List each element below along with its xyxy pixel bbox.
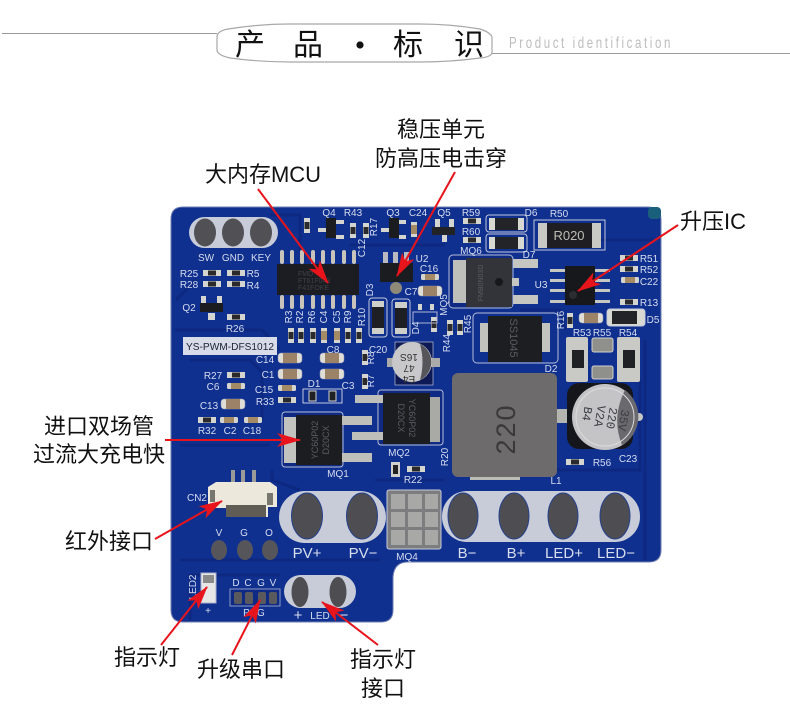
board silkscreen labels: C12 xyxy=(357,238,368,257)
MOSFET MQ2: D20CX xyxy=(396,403,406,433)
board silkscreen labels: R55 xyxy=(593,328,612,339)
board silkscreen labels: R3 xyxy=(284,310,295,323)
callout: dual MOSFET input xyxy=(33,414,300,467)
V G O pads xyxy=(211,528,278,560)
board silkscreen labels: MQ2 xyxy=(388,448,410,459)
inductor L1: 220 xyxy=(491,403,521,455)
board silkscreen labels: D3 xyxy=(365,283,376,296)
model label plate: YS-PWM-DFS1012 xyxy=(186,342,274,353)
inductor L1 xyxy=(452,373,557,480)
board silkscreen labels: MQ6 xyxy=(460,246,482,257)
board silkscreen labels: R8 xyxy=(366,351,377,364)
board silkscreen labels: R33 xyxy=(256,397,275,408)
board silkscreen labels: R44 xyxy=(442,333,453,352)
passive components xyxy=(198,218,639,477)
callout: infrared port: 红外接口 xyxy=(65,529,153,554)
callout: voltage regulation xyxy=(375,117,507,276)
title badge: 品 xyxy=(293,29,323,62)
MOSFET MQ1: D20CX xyxy=(321,425,331,455)
MOSFET MQ1: YC60P02 xyxy=(310,421,320,459)
callout: infrared port xyxy=(65,501,222,554)
MOSFET MQ6 xyxy=(449,255,538,308)
electrolytic capacitor C23: 220 xyxy=(602,406,620,430)
board silkscreen labels: D5 xyxy=(647,315,660,326)
electrolytic capacitor C20 xyxy=(387,342,440,385)
board silkscreen labels: R27 xyxy=(204,371,223,382)
callout: dual MOSFET input: 进口双场管 xyxy=(44,414,154,439)
board silkscreen labels: D4 xyxy=(411,321,422,334)
header: right rule xyxy=(491,53,790,54)
main MCU chip: FMD xyxy=(298,271,313,278)
sense resistor R020 xyxy=(534,220,605,250)
board silkscreen labels: D2 xyxy=(545,364,558,375)
callout: boost IC xyxy=(578,209,746,291)
board silkscreen labels: D6 xyxy=(525,208,538,219)
programming header PRG xyxy=(230,578,280,619)
board silkscreen labels: D1 xyxy=(308,379,321,390)
solder strip: B- B+ LED+ LED-: B− xyxy=(458,545,477,562)
board silkscreen labels: R45 xyxy=(463,314,474,333)
V G O pads: V xyxy=(216,528,223,539)
callout: MCU xyxy=(205,162,328,283)
electrolytic capacitor C23: B4 xyxy=(578,405,594,422)
callout: dual MOSFET input: 过流大充电快 xyxy=(33,442,165,467)
board silkscreen labels: MQ1 xyxy=(327,469,349,480)
indicator LED2 xyxy=(188,573,216,617)
board silkscreen labels: R53 xyxy=(573,328,592,339)
board silkscreen labels: Q5 xyxy=(437,208,451,219)
LED solder pads xyxy=(284,575,356,624)
board silkscreen labels: U2 xyxy=(416,254,429,265)
circuit board xyxy=(171,207,661,624)
board silkscreen labels: R13 xyxy=(640,298,659,309)
title badge: 识 xyxy=(454,29,484,62)
board silkscreen labels: C15 xyxy=(255,385,274,396)
board silkscreen labels: R6 xyxy=(307,310,318,323)
board substrate xyxy=(171,207,661,622)
MOSFET pad array MQ4: MQ4 xyxy=(396,552,418,563)
board silkscreen labels: C7 xyxy=(405,287,418,298)
sense resistor R020: R020 xyxy=(553,228,585,243)
board silkscreen labels: R10 xyxy=(357,307,368,326)
Schottky diode SS1045: SS1045 xyxy=(507,318,519,358)
board silkscreen labels: R60 xyxy=(462,227,481,238)
title badge: 标 xyxy=(393,29,423,62)
small SOT transistors xyxy=(200,218,455,320)
board silkscreen labels: R20 xyxy=(440,447,451,466)
MOSFET pad array MQ4 xyxy=(387,490,441,563)
terminals: SW GND KEY xyxy=(189,217,278,264)
solder strip: B- B+ LED+ LED-: LED− xyxy=(597,545,635,562)
board silkscreen labels: R28 xyxy=(180,280,199,291)
board silkscreen labels: C1 xyxy=(262,370,275,381)
subtitle: Product identification xyxy=(509,33,673,51)
title badge xyxy=(217,24,492,62)
board silkscreen labels: C8 xyxy=(327,345,340,356)
board silkscreen labels: R25 xyxy=(180,269,199,280)
board silkscreen labels: C16 xyxy=(420,264,439,275)
callout: voltage regulation: 稳压单元 xyxy=(397,117,485,142)
board silkscreen labels: R52 xyxy=(640,265,659,276)
board silkscreen labels: R54 xyxy=(619,328,638,339)
voltage regulator chip U2 xyxy=(380,252,413,294)
board silkscreen labels: C20 xyxy=(369,345,388,356)
board silkscreen labels: C4 xyxy=(319,310,330,323)
board silkscreen labels: C22 xyxy=(640,277,659,288)
board silkscreen labels: C14 xyxy=(256,355,275,366)
board silkscreen labels: R59 xyxy=(462,208,481,219)
MOSFET MQ2 xyxy=(355,390,443,445)
title badge: 产 xyxy=(235,29,265,62)
board silkscreen labels: R2 xyxy=(295,310,306,323)
board silkscreen labels: R56 xyxy=(593,458,612,469)
power resistors R53 R55 R54 xyxy=(566,337,640,382)
board silkscreen labels: R7 xyxy=(366,374,377,387)
board silkscreen labels: C13 xyxy=(200,401,219,412)
board silkscreen labels: Q2 xyxy=(182,303,196,314)
boost IC U3 xyxy=(550,266,610,305)
board silkscreen labels: R26 xyxy=(226,324,245,335)
LED solder pads: LED xyxy=(310,611,330,622)
V G O pads: O xyxy=(265,528,273,539)
board silkscreen labels: C23 xyxy=(619,454,638,465)
board silkscreen labels: R43 xyxy=(344,208,363,219)
board silkscreen labels: R17 xyxy=(369,217,380,236)
electrolytic capacitor C20: 47 xyxy=(403,362,415,373)
callout: boost IC: 升压IC xyxy=(680,209,746,234)
electrolytic capacitor C23 xyxy=(557,383,643,450)
electrolytic capacitor C23: V2A xyxy=(590,404,608,429)
infrared connector CN2: CN2 xyxy=(187,493,207,504)
callout: upgrade serial port: 升级串口 xyxy=(197,657,285,682)
solder strip: PV+ PV-: PV+ xyxy=(293,545,322,562)
board silkscreen labels: C2 xyxy=(224,426,237,437)
callout: indicator light port: 接口 xyxy=(361,676,405,701)
solder strip: PV+ PV- xyxy=(279,491,386,562)
solder strip: B- B+ LED+ LED-: LED+ xyxy=(545,545,583,562)
terminals: SW GND KEY: KEY xyxy=(251,253,271,264)
main MCU chip xyxy=(277,250,359,309)
board silkscreen labels: C6 xyxy=(207,382,220,393)
model label plate xyxy=(183,337,277,355)
callout: indicator light port: 指示灯 xyxy=(350,647,416,672)
board silkscreen labels: R16 xyxy=(556,310,567,329)
callout: indicator light port xyxy=(322,602,416,701)
board silkscreen labels xyxy=(180,208,660,487)
indicator LED2: + xyxy=(205,606,211,617)
board silkscreen labels: Q3 xyxy=(386,208,400,219)
electrolytic capacitor C20: E4 xyxy=(402,373,415,384)
callout: indicator light xyxy=(114,587,207,670)
board silkscreen labels: C5 xyxy=(332,310,343,323)
callout: upgrade serial port xyxy=(197,600,285,682)
board silkscreen labels: R50 xyxy=(550,209,569,220)
Schottky diode SS1045 xyxy=(473,313,558,363)
callout: MCU: 大内存MCU xyxy=(205,162,321,187)
board silkscreen labels: R32 xyxy=(198,426,217,437)
board silkscreen labels: R9 xyxy=(343,310,354,323)
electrolytic capacitor C23: 35V xyxy=(614,408,631,433)
diodes D3 D4 D5 D1 D6 xyxy=(303,215,645,403)
V G O pads: G xyxy=(240,528,248,539)
board silkscreen labels: U3 xyxy=(535,280,548,291)
header: left rule xyxy=(2,33,217,34)
board silkscreen labels: R51 xyxy=(640,254,659,265)
programming header PRG: G xyxy=(257,578,265,589)
solder strip: B- B+ LED+ LED- xyxy=(442,491,640,562)
MOSFET MQ1 xyxy=(282,412,372,467)
electrolytic capacitor C20: 16S xyxy=(400,351,418,362)
programming header PRG: PRG xyxy=(243,608,265,619)
solder strip: PV+ PV-: PV− xyxy=(349,545,378,562)
board silkscreen labels: R4 xyxy=(247,281,260,292)
LED solder pads: − xyxy=(340,607,349,624)
board silkscreen labels: Q4 xyxy=(322,208,336,219)
board silkscreen labels: C24 xyxy=(409,208,428,219)
main MCU chip: FT61F043 xyxy=(298,278,330,285)
terminals: SW GND KEY: SW xyxy=(198,253,215,264)
LED solder pads: + xyxy=(294,607,303,624)
copper traces xyxy=(175,215,655,620)
MOSFET MQ6: FMB0N03D xyxy=(478,265,485,301)
terminals: SW GND KEY: GND xyxy=(222,253,244,264)
indicator LED2: LED2 xyxy=(188,574,199,600)
MOSFET MQ2: YC60P02 xyxy=(407,399,417,437)
board silkscreen labels: MQ5 xyxy=(439,294,450,316)
board silkscreen labels: R22 xyxy=(404,475,423,486)
programming header PRG: V xyxy=(270,578,277,589)
board silkscreen labels: C18 xyxy=(243,426,262,437)
board silkscreen labels: R5 xyxy=(247,269,260,280)
programming header PRG: C xyxy=(244,578,252,589)
board silkscreen labels: L1 xyxy=(550,476,562,487)
board silkscreen labels: C3 xyxy=(342,381,355,392)
board silkscreen labels: D7 xyxy=(523,250,536,261)
programming header PRG: D xyxy=(232,578,240,589)
main MCU chip: F41FOKE xyxy=(298,285,329,292)
infrared connector CN2 xyxy=(187,470,277,517)
callout: voltage regulation: 防高压电击穿 xyxy=(375,146,507,171)
solder strip: B- B+ LED+ LED-: B+ xyxy=(507,545,526,562)
callout: indicator light: 指示灯 xyxy=(114,645,180,670)
